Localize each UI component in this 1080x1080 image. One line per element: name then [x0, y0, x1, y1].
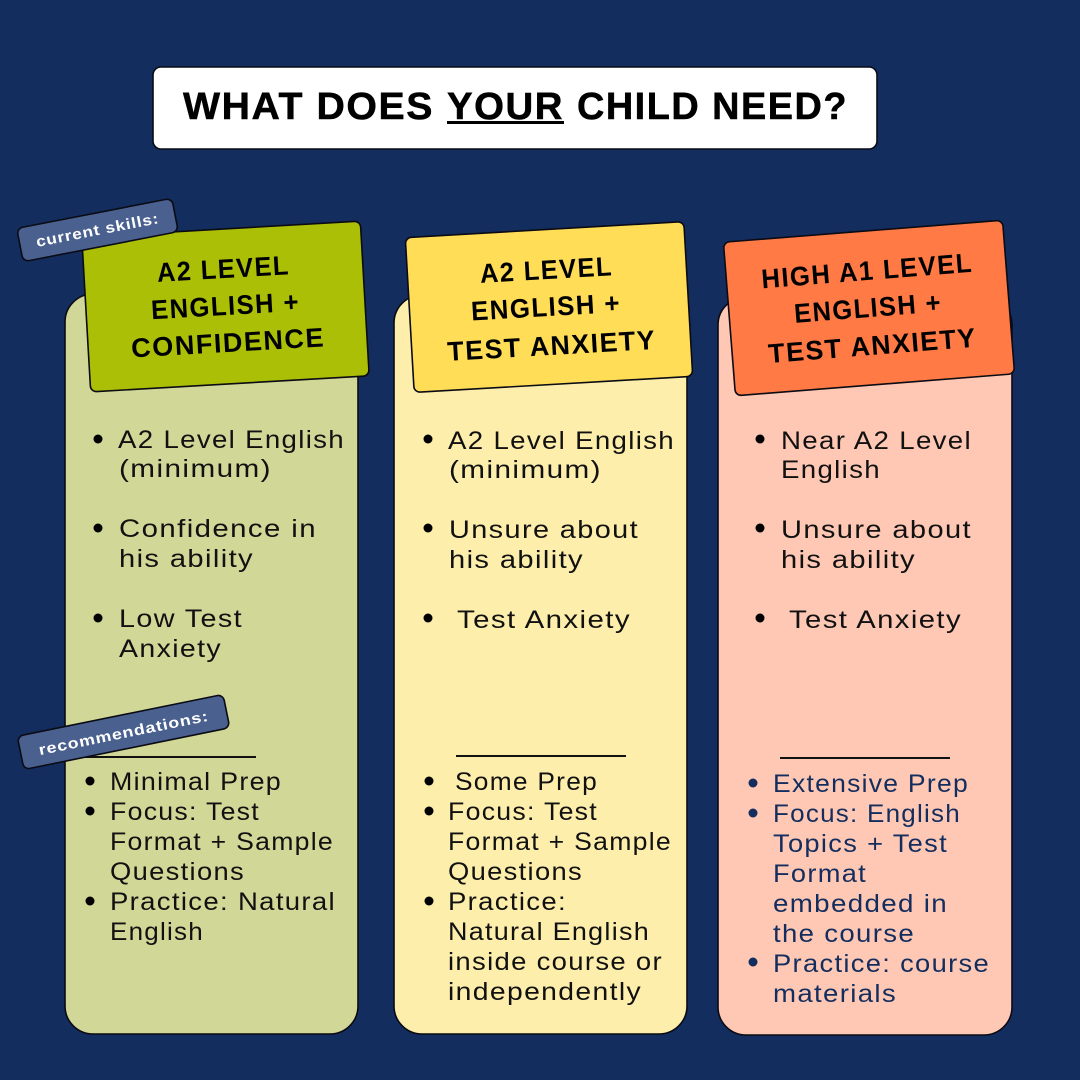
current skills list: column 2 [424, 427, 675, 634]
recommendations list: column 2: Some Prep [455, 768, 598, 796]
heading card: A2 level English + test anxiety: A2 LEVEL [479, 251, 614, 289]
title: YOUR [447, 86, 564, 128]
current skills list: column 1: his ability [119, 545, 254, 573]
recommendations list: column 1: Format + Sample [110, 828, 334, 856]
recommendations list: column 1 [86, 768, 336, 946]
label: current skills [17, 198, 178, 262]
label: current skills: current skills: [35, 210, 161, 251]
heading card: high A1 level English + test anxiety: TEST ANXIETY [767, 323, 978, 369]
label: recommendations [17, 694, 230, 770]
recommendations list: column 2: Questions [448, 858, 583, 886]
title: WHAT DOES [183, 86, 434, 128]
heading card: high A1 level English + test anxiety [723, 220, 1015, 396]
recommendations list: column 2 [424, 768, 672, 1006]
heading card: A2 level English + confidence [82, 221, 369, 392]
recommendations list: column 1: Questions [110, 858, 245, 886]
title: CHILD NEED? [577, 86, 848, 128]
recommendations list: column 1: English [110, 918, 204, 946]
recommendations list: column 3: Practice: course [773, 950, 990, 978]
current skills list: column 3: Near A2 Level [781, 427, 972, 455]
heading card: A2 level English + confidence: CONFIDENCE [130, 322, 326, 363]
current skills list: column 2: Unsure about [449, 516, 639, 544]
heading card: high A1 level English + test anxiety: HIGH A1 LEVEL [760, 248, 974, 294]
heading card: A2 level English + test anxiety [405, 222, 693, 392]
current skills list: column 2: his ability [449, 546, 584, 574]
current skills list: column 3: Test Anxiety [789, 606, 962, 634]
recommendations list: column 3: Extensive Prep [773, 770, 969, 798]
current skills list: column 1 [94, 426, 345, 663]
recommendations list: column 2: Natural English [448, 918, 650, 946]
title [153, 67, 877, 149]
recommendations list: column 2: inside course or [448, 948, 663, 976]
current skills list: column 3: English [781, 456, 881, 484]
recommendations list: column 3 [748, 770, 990, 1008]
panel: A2 level plus confidence [65, 294, 358, 1034]
recommendations list: column 3: Focus: English [773, 800, 961, 828]
current skills list: column 2: (minimum) [449, 456, 602, 484]
heading card: A2 level English + confidence: A2 LEVEL [156, 250, 291, 288]
current skills list: column 1: (minimum) [119, 455, 272, 483]
heading card: A2 level English + confidence: ENGLISH + [150, 287, 301, 325]
recommendations list: column 2: Focus: Test [448, 798, 598, 826]
current skills list: column 3: his ability [781, 546, 916, 574]
recommendations list: column 1: Practice: Natural [110, 888, 336, 916]
recommendations list: column 1: Focus: Test [110, 798, 260, 826]
current skills list: column 1: Low Test [119, 605, 243, 633]
heading card: A2 level English + test anxiety: TEST ANXIETY [447, 325, 657, 367]
current skills list: column 3: Unsure about [781, 516, 972, 544]
panel: high A1 level plus test anxiety [718, 297, 1012, 1035]
current skills list: column 1: Confidence in [119, 515, 317, 543]
panel: A2 level plus test anxiety [394, 295, 687, 1034]
recommendations list: column 3: materials [773, 980, 897, 1008]
recommendations list: column 3: embedded in [773, 890, 948, 918]
current skills list: column 2: A2 Level English [448, 427, 675, 455]
heading card: high A1 level English + test anxiety: ENGLISH + [793, 287, 943, 329]
recommendations list: column 3: Topics + Test [773, 830, 948, 858]
current skills list: column 2: Test Anxiety [457, 606, 631, 634]
recommendations list: column 3: Format [773, 860, 867, 888]
heading card: A2 level English + test anxiety: ENGLISH + [470, 288, 622, 326]
label: recommendations: recommendations: [37, 708, 210, 759]
recommendations list: column 2: Practice: [448, 888, 567, 916]
recommendations list: column 3: the course [773, 920, 915, 948]
current skills list: column 1: Anxiety [119, 635, 222, 663]
recommendations list: column 2: Format + Sample [448, 828, 672, 856]
recommendations list: column 1: Minimal Prep [110, 768, 282, 796]
current skills list: column 3 [756, 427, 972, 634]
recommendations list: column 2: independently [448, 978, 642, 1006]
current skills list: column 1: A2 Level English [118, 426, 345, 454]
